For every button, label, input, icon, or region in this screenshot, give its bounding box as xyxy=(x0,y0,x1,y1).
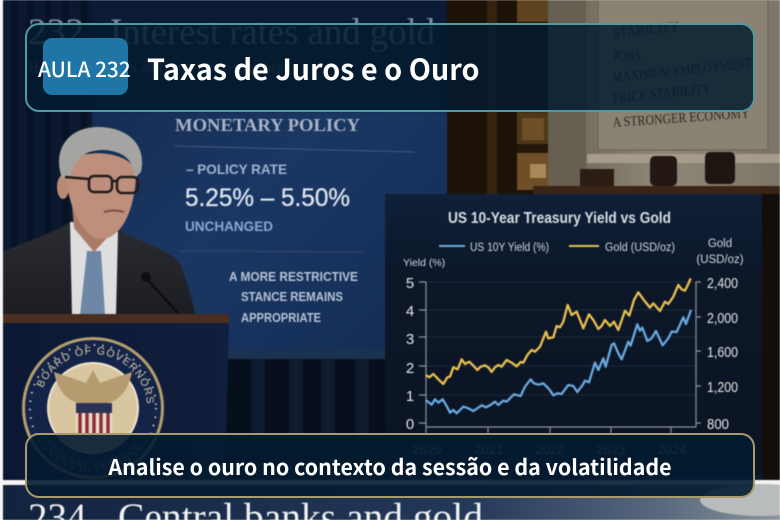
left curtain xyxy=(3,0,95,320)
wall inscription: JOBS xyxy=(613,49,641,64)
legend: gold: Gold (USD/oz) xyxy=(605,242,675,254)
shirt xyxy=(70,222,118,315)
x axis year labels: 2024 xyxy=(658,442,686,457)
right axis labels: 800 xyxy=(707,417,729,433)
right axis labels: 2,400 xyxy=(707,276,738,292)
legend: gold xyxy=(569,242,675,254)
federal reserve seal xyxy=(21,336,165,479)
gold line xyxy=(426,278,691,384)
neck xyxy=(72,205,120,252)
chart title: US 10-Year Treasury Yield vs Gold xyxy=(448,210,671,227)
unchanged label: UNCHANGED xyxy=(185,218,273,234)
wall inscription: STABILITY xyxy=(612,20,680,42)
yield line xyxy=(426,310,691,413)
face xyxy=(66,153,136,239)
white divider xyxy=(0,480,780,485)
left axis labels: 4 xyxy=(406,303,414,320)
gridlines xyxy=(426,282,696,395)
chart panel xyxy=(385,194,762,474)
right axis title: Gold xyxy=(708,238,732,250)
left axis labels xyxy=(406,275,414,433)
lesson number: AULA 232 xyxy=(38,53,131,83)
ghost heading: lesson 232: Interest rates and gold xyxy=(110,12,435,53)
left axis labels: 5 xyxy=(406,275,414,292)
wall inscription: PRICE STABILITY xyxy=(612,82,712,107)
left axis labels: 1 xyxy=(406,388,414,405)
restrictive stance text xyxy=(229,270,358,325)
seal lower lettering: FEDERAL RESERVE xyxy=(46,443,47,444)
glasses xyxy=(65,176,138,193)
next lesson image strip xyxy=(3,484,780,520)
bottom caption: Analise o ouro no contexto da sessão e da volatilidade xyxy=(108,451,672,482)
restrictive stance text: STANCE REMAINS xyxy=(241,290,343,304)
lower curtain xyxy=(223,349,388,480)
x axis year labels: 2023 xyxy=(597,442,625,457)
right axis title xyxy=(696,238,744,266)
mouth xyxy=(104,210,124,212)
x axis year labels: 2020 xyxy=(413,442,441,457)
white left edge xyxy=(0,0,3,520)
speaker xyxy=(3,127,196,317)
ear xyxy=(57,175,69,199)
right axis title: (USD/oz) xyxy=(696,254,744,266)
right axis labels xyxy=(707,276,738,433)
left axis labels: 0 xyxy=(406,416,414,433)
x axis year labels: 2022 xyxy=(536,442,564,457)
eagle xyxy=(54,370,132,404)
x axis year labels: 2021 xyxy=(475,442,503,457)
ghost subheading: How interest rates and gold move together xyxy=(28,60,283,76)
x axis year labels xyxy=(413,442,686,457)
hair xyxy=(59,127,142,178)
right axis labels: 1,600 xyxy=(707,345,738,361)
wall inscription xyxy=(612,20,753,131)
left axis title: Yield (%) xyxy=(403,257,445,269)
suit xyxy=(3,222,196,317)
top banner panel xyxy=(25,23,755,112)
chairs and dais xyxy=(533,152,780,480)
bottom banner panel xyxy=(25,433,755,498)
stone wall xyxy=(548,0,780,190)
wood bookcase xyxy=(447,0,550,194)
right axis labels: 1,200 xyxy=(707,380,738,396)
right axis labels: 2,000 xyxy=(707,311,738,327)
main title: Taxas de Juros e o Ouro xyxy=(147,48,480,89)
shield xyxy=(76,403,112,435)
legend: yield: US 10Y Yield (%) xyxy=(470,242,549,254)
microphone xyxy=(141,272,178,313)
podium xyxy=(3,314,229,480)
policy rate: – POLICY RATE xyxy=(186,161,287,177)
lesson badge xyxy=(43,38,128,95)
seal lettering: BOARD OF GOVERNORS xyxy=(36,346,154,404)
screen heading: MONETARY POLICY xyxy=(175,115,360,135)
restrictive stance text: APPROPRIATE xyxy=(241,311,321,325)
policy rate value: 5.25% – 5.50% xyxy=(185,184,350,212)
axes xyxy=(419,282,701,433)
legend: yield xyxy=(439,242,549,254)
ghost heading: lesson 232: 232. xyxy=(28,12,94,53)
left axis labels: 3 xyxy=(406,331,414,348)
tie xyxy=(80,251,105,315)
restrictive stance text: A MORE RESTRICTIVE xyxy=(229,270,358,284)
wall inscription: A STRONGER ECONOMY xyxy=(612,106,750,131)
monetary policy screen xyxy=(92,0,447,350)
left axis labels: 2 xyxy=(406,360,414,377)
